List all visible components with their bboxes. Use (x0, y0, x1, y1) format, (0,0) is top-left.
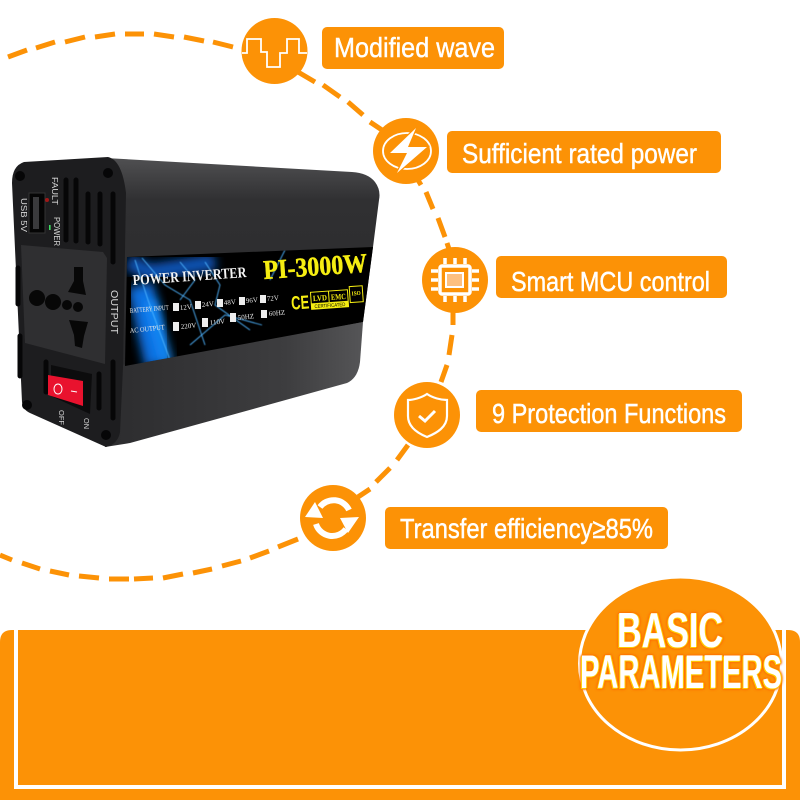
icon: MCU chip (422, 247, 488, 313)
AC output options: 50HZ (237, 312, 254, 322)
USB port and indicators: FAULT (50, 177, 59, 205)
label: Sufficient rated power (447, 131, 721, 173)
icon: protection shield (394, 382, 460, 448)
AC output options: 220V (180, 321, 197, 331)
label: Modified wave (322, 27, 504, 69)
certification marks: ISO (352, 291, 361, 297)
label: Smart MCU control: Smart MCU control (511, 266, 710, 297)
USB port and indicators (19, 177, 61, 246)
certification marks: CE (291, 292, 310, 315)
label: Sufficient rated power: Sufficient rated power (462, 138, 697, 169)
OUTPUT label: OUTPUT (108, 290, 119, 334)
battery input options (129, 294, 279, 315)
USB port and indicators: POWER (52, 217, 61, 246)
USB port and indicators: USB 5V (19, 198, 28, 233)
battery input options: 96V (245, 296, 258, 305)
product banner (125, 247, 373, 366)
front plate (12, 157, 126, 447)
AC output options (129, 309, 285, 335)
certification marks: LVD (313, 293, 327, 303)
rocker switch (48, 365, 92, 429)
battery input options: BATTERY INPUT (129, 304, 170, 315)
certification marks: CERTIFICATED (314, 302, 346, 310)
label: Transfer efficiency: Transfer efficiency≥85% (400, 513, 653, 544)
dashed connector arc (0, 34, 453, 579)
rocker switch: OFF (57, 410, 64, 425)
AC output options: AC OUTPUT (129, 323, 166, 335)
label: Modified wave: Modified wave (334, 32, 495, 63)
label: Smart MCU control (496, 256, 727, 298)
AC output options: 110V (209, 317, 225, 327)
banner title: POWER INVERTER (132, 265, 247, 289)
label: 9 Protection Functions (476, 390, 742, 432)
model name: PI-3000W (262, 248, 368, 285)
battery input options: 48V (223, 298, 236, 307)
icon: modified wave (242, 18, 308, 84)
inverter body (105, 158, 380, 447)
battery input options: 12V (179, 303, 192, 312)
badge: basic parameters (580, 577, 782, 750)
inverter product photo (12, 157, 380, 447)
battery input options: 24V (201, 300, 214, 309)
icon: transfer cycle arrows (300, 485, 366, 551)
certification marks (291, 286, 364, 315)
label: 9 Protection Functions: 9 Protection Functions (492, 398, 726, 429)
certification marks: EMC (331, 292, 346, 302)
AC socket (21, 245, 107, 364)
battery input options: 72V (266, 294, 279, 303)
label: Transfer efficiency (385, 507, 668, 549)
icon: lightning power (373, 118, 439, 184)
rocker switch: ON (82, 418, 89, 429)
bottom orange panel (0, 630, 800, 800)
AC output options: 60HZ (268, 309, 285, 318)
badge: basic parameters: BASIC (617, 604, 723, 658)
